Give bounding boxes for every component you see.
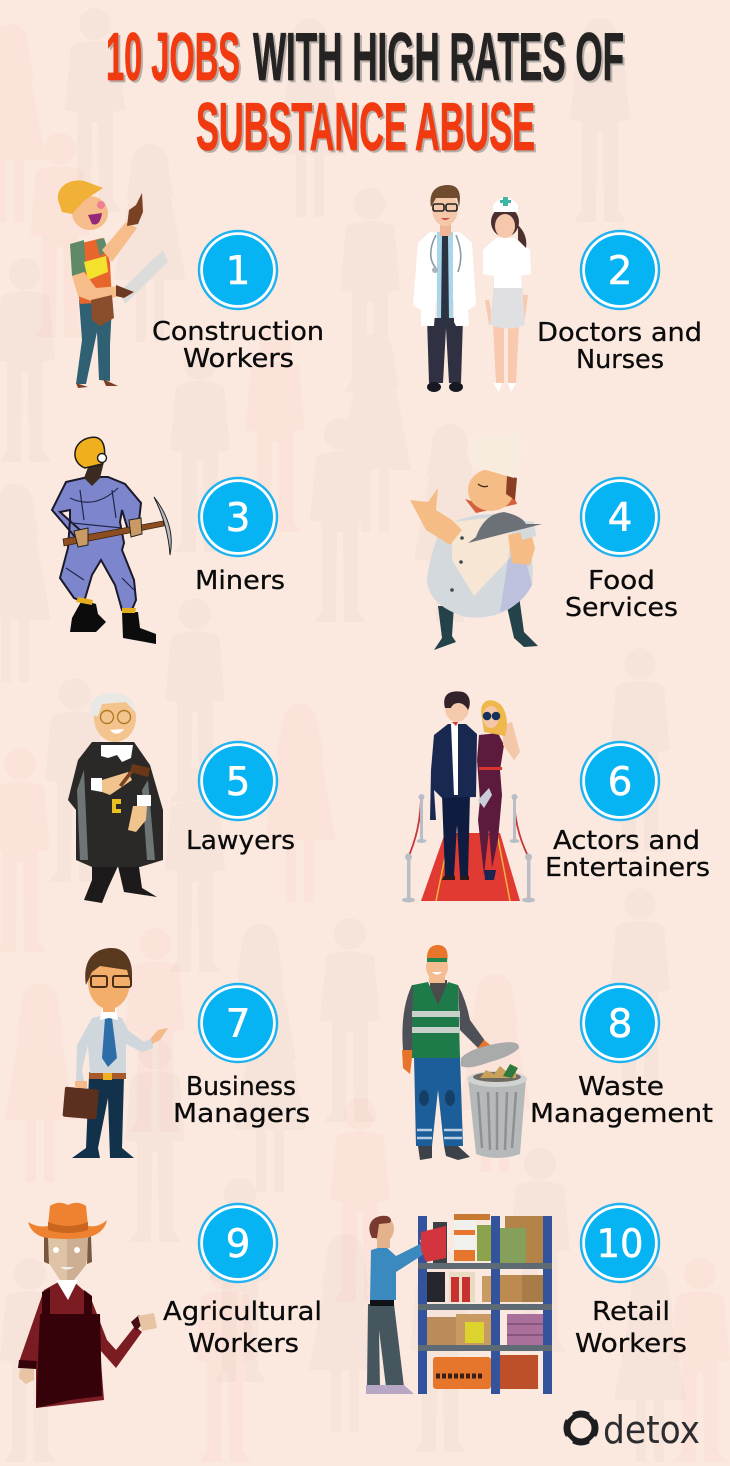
- number badge 3: [199, 478, 277, 556]
- number badge 8: [581, 984, 659, 1062]
- label: Doctors and Nurses: Doctors and: [537, 318, 702, 348]
- number badge 9: 9: [226, 1222, 250, 1267]
- figure: farmer: [18, 1203, 157, 1408]
- label: Food Services: [565, 566, 678, 623]
- label: Actors and Entertainers: Entertainers: [545, 853, 710, 883]
- number badge 10: 10: [596, 1222, 644, 1267]
- label: Actors and Entertainers: Actors and: [553, 826, 700, 856]
- label: Food Services: Services: [565, 593, 678, 623]
- title: 10 JOBS: [106, 19, 240, 95]
- label: Construction Workers: Workers: [183, 344, 294, 374]
- title: [106, 19, 624, 165]
- number badge 2: 2: [608, 249, 632, 294]
- number badge 4: [581, 478, 659, 556]
- number badge 3: 3: [226, 496, 250, 541]
- figure: chef: [410, 433, 542, 650]
- number badge 5: [199, 742, 277, 820]
- label: Business Managers: Managers: [173, 1099, 310, 1129]
- label: Waste Management: Management: [530, 1099, 713, 1129]
- label: Miners: Miners: [195, 566, 285, 596]
- label: Food Services: Food: [588, 566, 655, 596]
- figure: waste worker: [402, 945, 527, 1160]
- number badge 6: [581, 742, 659, 820]
- logo: detox: [566, 1408, 700, 1452]
- figure: miner: [52, 437, 171, 644]
- label: Lawyers: Lawyers: [186, 826, 295, 856]
- number badge 2: [581, 231, 659, 309]
- label: Retail Workers: Workers: [575, 1329, 687, 1359]
- label: Actors and Entertainers: [545, 826, 710, 883]
- figure: lawyer: [68, 693, 163, 903]
- label: Construction Workers: Construction: [152, 317, 324, 347]
- number badge 7: 7: [226, 1002, 250, 1047]
- figure: retail worker with shelves: [366, 1214, 552, 1394]
- label: Construction Workers: [152, 317, 324, 374]
- figure: construction worker: [58, 180, 168, 388]
- number badge 6: 6: [608, 760, 632, 805]
- number badge 8: 8: [608, 1002, 632, 1047]
- label: Waste Management: Waste: [578, 1072, 664, 1102]
- label: Business Managers: Business: [186, 1072, 296, 1102]
- number badge 1: 1: [226, 249, 250, 294]
- number badge 9: [199, 1204, 277, 1282]
- figure: actors on red carpet: [402, 691, 535, 902]
- number badge 5: 5: [226, 760, 250, 805]
- number badge 4: 4: [608, 496, 632, 541]
- figure: business manager: [62, 948, 168, 1158]
- number badge 7: [199, 984, 277, 1062]
- label: Agricultural Workers: Workers: [188, 1329, 299, 1359]
- logo: detox: detox: [603, 1408, 700, 1452]
- label: Doctors and Nurses: Nurses: [576, 345, 664, 375]
- number badge 1: [199, 231, 277, 309]
- label: Retail Workers: Retail: [592, 1297, 670, 1327]
- number badge 10: [581, 1204, 659, 1282]
- figure: doctor and nurse: [413, 185, 531, 392]
- label: Business Managers: [173, 1072, 310, 1129]
- label: Waste Management: [530, 1072, 713, 1129]
- label: Agricultural Workers: Agricultural: [163, 1297, 322, 1327]
- label: Retail Workers: [575, 1297, 687, 1359]
- label: Agricultural Workers: [163, 1297, 322, 1359]
- label: Doctors and Nurses: [537, 318, 702, 375]
